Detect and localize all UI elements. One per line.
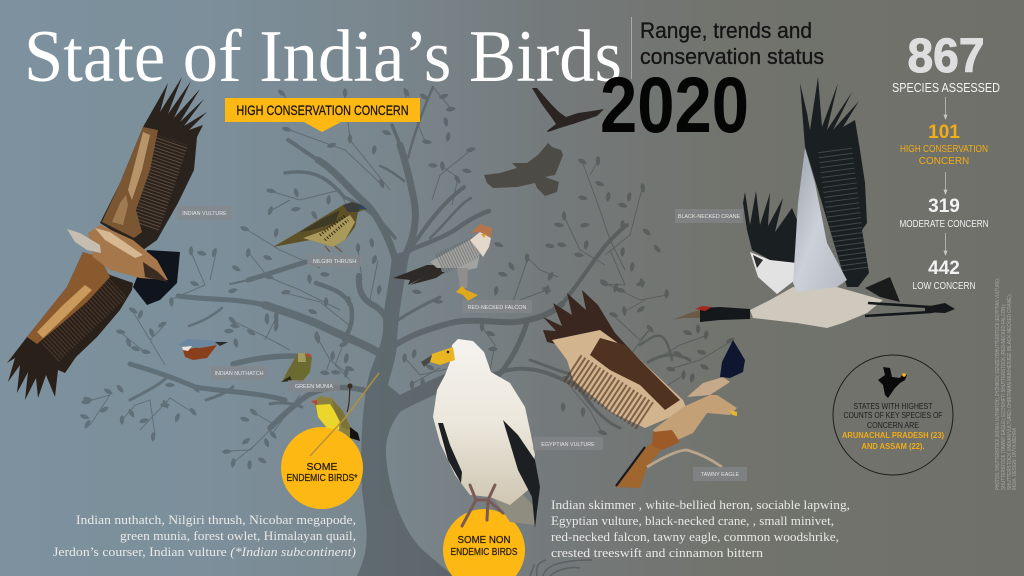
- bird: Nilgiri thrush: [273, 202, 367, 252]
- far wing: [687, 377, 730, 397]
- trunk: [357, 250, 480, 576]
- photo credits (vertical): [995, 278, 1018, 490]
- stat: 101 high conservation concern: [900, 122, 988, 167]
- panel: some endemic birds circle: [281, 427, 363, 509]
- stat: 442 low concern: LOW CONCERN: [912, 281, 976, 292]
- stat: 319 moderate concern: 319: [928, 196, 960, 217]
- stat: 319 moderate concern: MODERATE CONCERN: [900, 219, 988, 230]
- label: tawny eagle: [693, 467, 747, 481]
- label: Indian vulture: [177, 206, 232, 220]
- bird: green munia: [281, 353, 312, 382]
- photo credits (vertical): SHUTTERSTOCK (INDIAN VULTURE); DHRITIMAN MUKHERJEE (BLACK-NECKED CRANE);: [1007, 294, 1013, 490]
- bird: red-necked falcon: [393, 224, 492, 301]
- panel: some endemic birds circle: ENDEMIC BIRDS*: [286, 472, 358, 484]
- text: endemic birds list: [53, 512, 356, 559]
- text: endemic birds list: Jerdon’s courser, Indian vulture (*Indian subcontinent): [53, 544, 356, 559]
- panel: some endemic birds circle: SOME: [307, 461, 337, 473]
- stat: 319 moderate concern: [900, 196, 988, 230]
- panel: states with highest counts: CONCERN ARE: [867, 421, 919, 430]
- banner: high conservation concern: HIGH CONSERVATION CONCERN: [236, 102, 408, 118]
- tail: [133, 250, 180, 305]
- photo credits (vertical): INDIA; DESIGN: DIVYA MEHRA: [1012, 427, 1018, 490]
- label: Nilgiri thrush: [307, 255, 362, 267]
- label: black-necked crane: [675, 209, 743, 223]
- icon: India map: [878, 367, 907, 398]
- arrow: [944, 233, 947, 255]
- upper wing: [100, 77, 207, 250]
- bird: yellow-breasted endemic on twig: [310, 373, 379, 456]
- panel: states with highest counts: ARUNACHAL PRADESH (23): [842, 431, 944, 440]
- body: [653, 395, 737, 442]
- wing feathers: [552, 330, 687, 428]
- text: endemic birds list: green munia, forest owlet, Himalayan quail,: [120, 528, 356, 543]
- banner: high conservation concern: [225, 98, 420, 132]
- neck and head: [67, 229, 101, 253]
- main branches: [130, 87, 690, 428]
- stat: 101 high conservation concern: 101: [928, 122, 960, 143]
- label: red-necked falcon: RED-NECKED FALCON: [468, 305, 526, 311]
- label: green munia: GREEN MUNIA: [295, 384, 333, 390]
- arrow: [944, 97, 947, 119]
- label: Egyptian vulture: [533, 437, 603, 450]
- body: [88, 225, 168, 280]
- subtitle block: Range, trends and: [640, 18, 812, 43]
- panel: some non endemic birds circle: ENDEMIC BIRDS: [450, 546, 518, 558]
- label: Indian nuthatch: INDIAN NUTHATCH: [214, 371, 264, 377]
- year 2020: 2020: [600, 60, 749, 149]
- bird: Indian vulture: [7, 77, 207, 400]
- subtitle block: [631, 17, 824, 79]
- label: Indian vulture: INDIAN VULTURE: [182, 211, 227, 217]
- panel: states with highest counts: [833, 355, 953, 475]
- subtitle block: conservation status: [640, 44, 824, 69]
- bird: tawny eagle: [543, 290, 745, 488]
- tree silhouette: [79, 87, 736, 576]
- panel: some non endemic birds circle: SOME NON: [458, 534, 510, 546]
- text: endemic birds list: Indian nuthatch, Nilgiri thrush, Nicobar megapode,: [76, 512, 356, 527]
- text: non-endemic birds list: Egyptian vulture, black-necked crane, , small minivet,: [551, 513, 834, 528]
- text: non-endemic birds list: Indian skimmer , white-bellied heron, sociable lapwing,: [551, 497, 850, 512]
- grass tuft at bottom: [530, 560, 592, 576]
- branch: [647, 450, 722, 467]
- text: non-endemic birds list: crested treeswift and cinnamon bittern: [551, 545, 764, 560]
- label: green munia: [288, 380, 340, 392]
- stat: 867 species assessed: 867: [908, 30, 984, 83]
- lower wing: [7, 252, 133, 400]
- label: tawny eagle: TAWNY EAGLE: [701, 472, 740, 478]
- stat: 442 low concern: [912, 258, 976, 292]
- panel: states with highest counts: AND ASSAM (22).: [862, 442, 924, 451]
- photo credits (vertical): SHUTTERSTOCK (TAWNY EAGLE); ECOSHIFT/ SHUTTERSTOCK (RED-NECKED FALCON);: [1001, 304, 1007, 490]
- bird: Indian nuthatch: [178, 339, 228, 360]
- label: Nilgiri thrush: NILGIRI THRUSH: [313, 259, 356, 265]
- stat: 867 species assessed: SPECIES ASSESSED: [892, 80, 1000, 95]
- stats column: [892, 30, 1000, 292]
- silhouette: flying bird near 2020: [532, 88, 604, 132]
- twigs: [85, 87, 730, 462]
- stat: 101 high conservation concern: HIGH CONSERVATION: [900, 144, 988, 155]
- stat: 101 high conservation concern: CONCERN: [919, 156, 969, 167]
- leaves: [79, 87, 736, 470]
- panel: states with highest counts: COUNTS OF KEY SPECIES OF: [844, 411, 943, 420]
- wing primaries: [543, 290, 650, 400]
- label: Egyptian vulture: EGYPTIAN VULTURE: [541, 442, 595, 448]
- panel: states with highest counts: STATES WITH HIGHEST: [854, 402, 933, 411]
- stat: 442 low concern: 442: [928, 258, 960, 279]
- title: State of India’s Birds: [24, 16, 622, 98]
- arrow: [944, 172, 947, 194]
- tail: [615, 433, 667, 488]
- bird: Egyptian vulture: [421, 339, 540, 528]
- photo credits (vertical): PHOTOS: SHUTTERSTOCK (INDIAN NUTHATCH); DYZHIKOV; DENIZEY/SHUTTERSTOCK (EGYPTIAN VULTURE);: [995, 278, 1001, 490]
- text: non-endemic birds list: [551, 497, 850, 560]
- silhouette: soaring bird: [484, 143, 563, 196]
- label: Indian nuthatch: [211, 366, 267, 380]
- label: red-necked falcon: [462, 300, 532, 313]
- text: non-endemic birds list: red-necked falcon, tawny eagle, common woodshrike,: [551, 529, 839, 544]
- panel: some non endemic birds circle: [443, 509, 525, 576]
- label: black-necked crane: BLACK-NECKED CRANE: [678, 214, 741, 220]
- stat: 867 species assessed: [892, 30, 1000, 95]
- bird: black-necked crane: [672, 77, 955, 328]
